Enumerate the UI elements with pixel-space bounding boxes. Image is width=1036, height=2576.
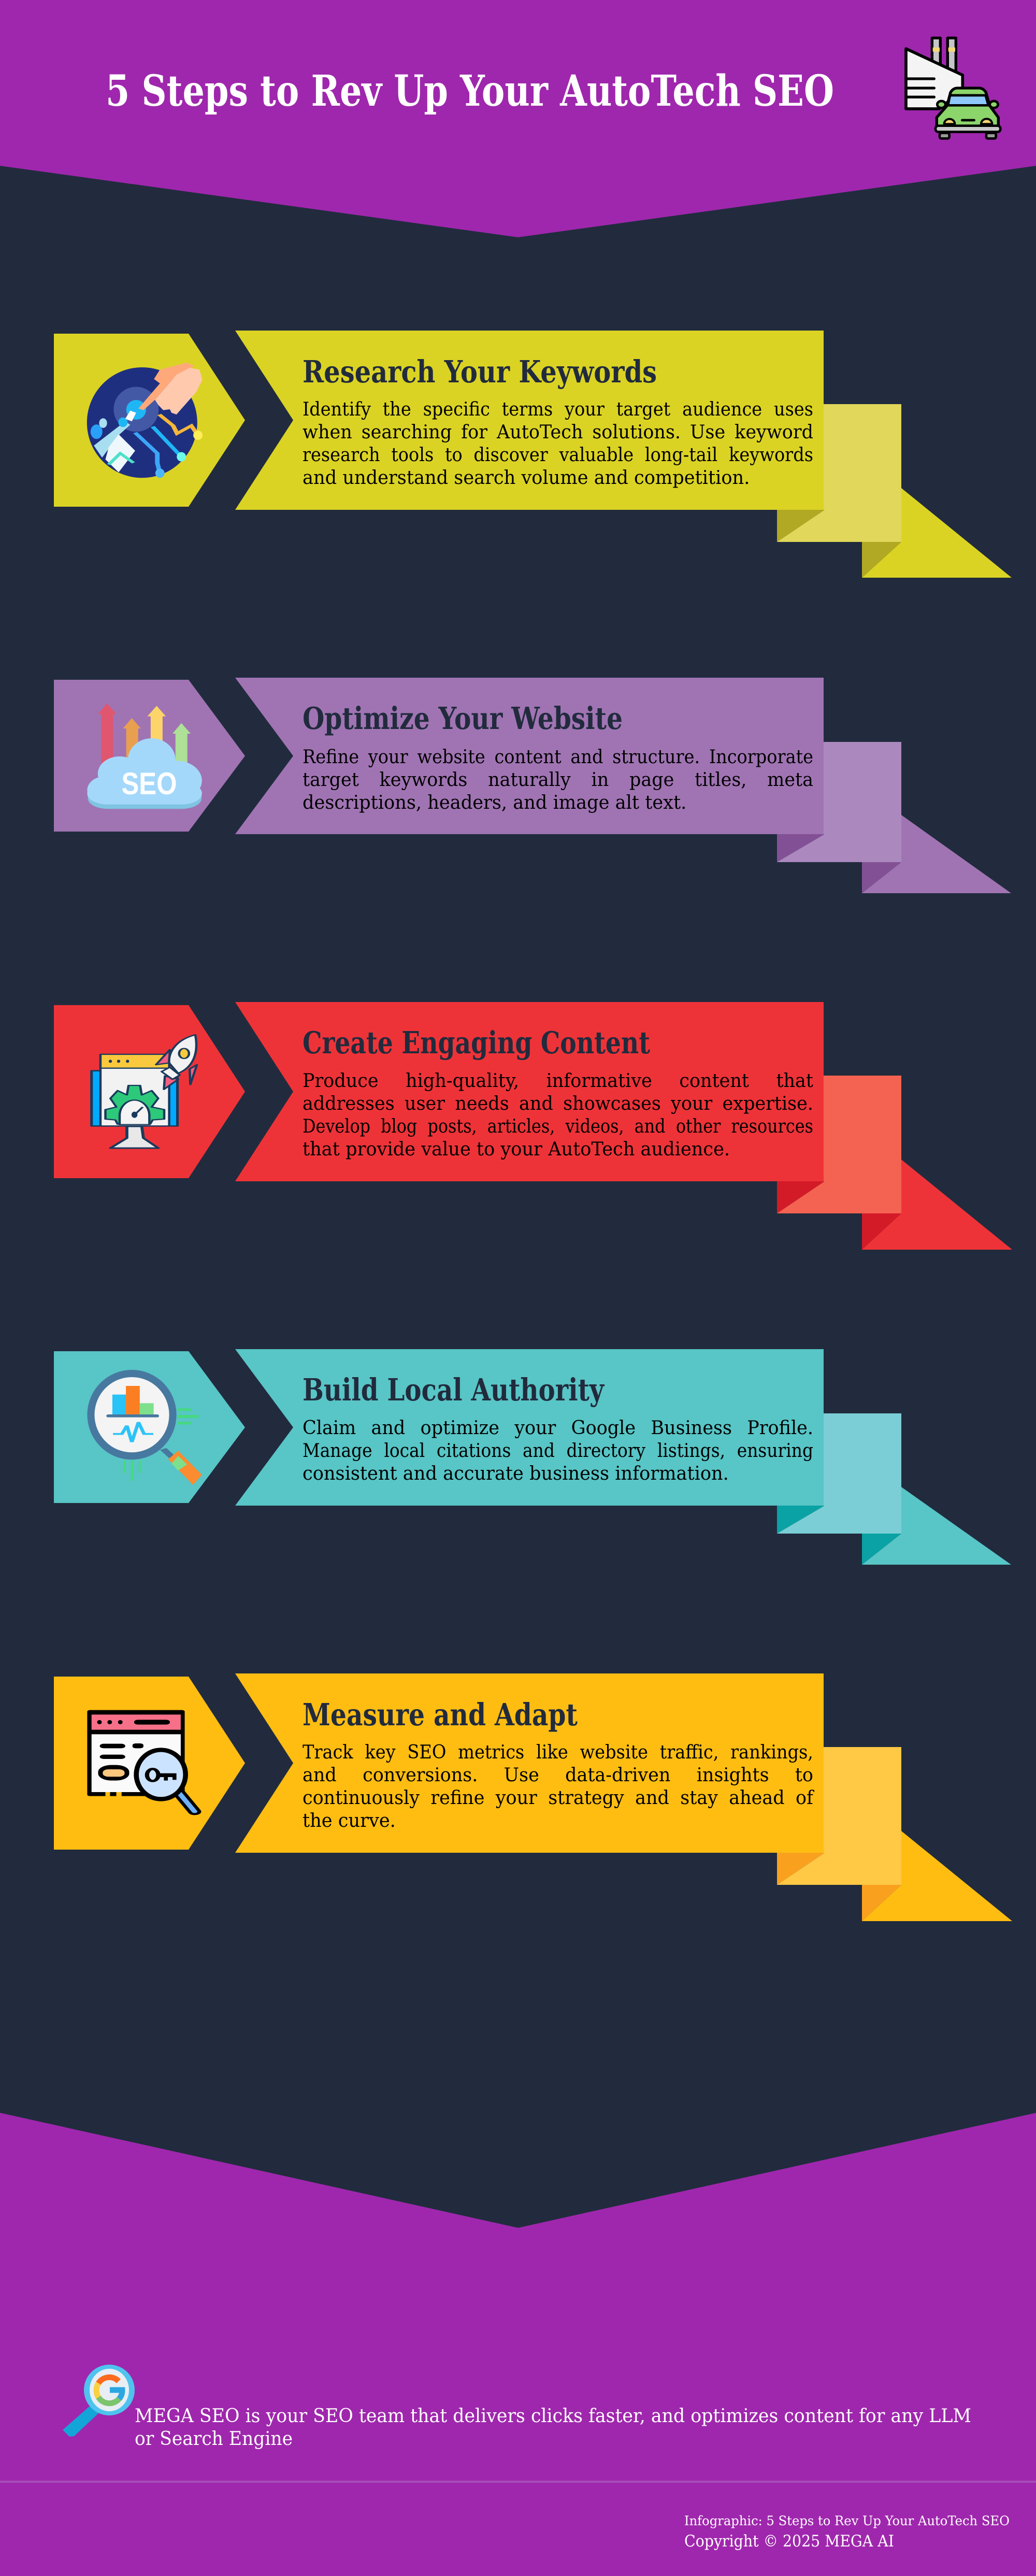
icon: browser window with key magnifier	[87, 1710, 195, 1812]
folded ribbon	[777, 1747, 1012, 1921]
body text	[303, 1742, 814, 1831]
content banner	[235, 1349, 824, 1506]
body text: Claim and optimize your Google Business Profile.	[303, 1418, 813, 1439]
body text	[303, 1418, 813, 1484]
body text: Refine your website content and structure. Incorporate	[303, 747, 813, 768]
icon hexagon background	[54, 1677, 245, 1850]
icon hexagon background	[54, 334, 245, 507]
credit text: Copyright © 2025 MEGA AI	[684, 2532, 894, 2551]
body text: Produce high-quality, informative content that	[303, 1070, 813, 1092]
body text: that provide value to your AutoTech audience.	[303, 1139, 730, 1160]
title: 5 Steps to Rev Up Your AutoTech SEO	[106, 66, 834, 116]
header banner	[0, 0, 1036, 237]
icon: magnifier with chart	[87, 1370, 202, 1485]
icon: seo cloud with arrows: SEO	[121, 766, 177, 801]
body text: continuously refine your strategy and stay ahead of	[303, 1787, 813, 1809]
folded ribbon	[777, 404, 1012, 578]
icon: factory and car	[906, 38, 1000, 138]
panel: step 2 optimize your website	[54, 678, 1011, 893]
footer panel	[0, 2113, 1036, 2576]
body text: and understand search volume and competition.	[303, 467, 750, 489]
body text	[303, 399, 813, 489]
credit text: Infographic: 5 Steps to Rev Up Your AutoTech SEO	[684, 2513, 1010, 2528]
icon: google magnifier	[63, 2365, 135, 2437]
content banner	[235, 1002, 824, 1181]
body text: when searching for AutoTech solutions. Use keyword	[303, 422, 813, 443]
icon: web page with gear gauge and rocket	[92, 1035, 197, 1148]
heading: Measure and Adapt	[303, 1697, 578, 1733]
tagline	[135, 2406, 971, 2450]
body text: addresses user needs and showcases your expertise.	[303, 1093, 813, 1114]
body text: Track key SEO metrics like website traffic, rankings,	[303, 1742, 813, 1763]
heading: Research Your Keywords	[303, 354, 657, 390]
heading: Build Local Authority	[303, 1372, 605, 1408]
folded ribbon	[777, 1413, 1011, 1565]
panel: step 1 research your keywords	[54, 331, 1012, 578]
body text: target keywords naturally in page titles, meta	[303, 769, 813, 791]
heading: Optimize Your Website	[303, 700, 623, 736]
body text	[303, 1070, 813, 1160]
icon hexagon background	[54, 680, 245, 832]
body text: research tools to discover valuable long-tail keywords	[303, 445, 813, 466]
content banner	[235, 678, 824, 834]
heading: Create Engaging Content	[303, 1025, 650, 1061]
body text: Develop blog posts, articles, videos, and other resources	[303, 1116, 813, 1137]
body text: and conversions. Use data-driven insights to	[303, 1765, 813, 1786]
body text: descriptions, headers, and image alt text.	[303, 792, 686, 813]
header background shape	[0, 0, 1036, 237]
panel: step 5 measure and adapt	[54, 1673, 1012, 1921]
tagline: MEGA SEO is your SEO team that delivers clicks faster, and optimizes content for any LLM	[135, 2406, 971, 2427]
panel: step 3 create engaging content	[54, 1002, 1012, 1250]
content banner	[235, 331, 824, 510]
icon hexagon background	[54, 1351, 245, 1503]
credit text	[684, 2513, 1010, 2551]
icon: pointing hand on circuit	[87, 363, 203, 478]
panel: step 4 build local authority	[54, 1349, 1011, 1565]
icon: seo cloud with arrows	[87, 704, 202, 809]
icon hexagon background	[54, 1005, 245, 1178]
folded ribbon	[777, 1076, 1012, 1250]
folded ribbon	[777, 742, 1011, 893]
body text: the curve.	[303, 1810, 396, 1831]
tagline: or Search Engine	[135, 2428, 293, 2450]
body text: Manage local citations and directory listings, ensuring	[303, 1440, 813, 1462]
footer background shape	[0, 2113, 1036, 2576]
body text: consistent and accurate business information.	[303, 1463, 729, 1484]
body text	[303, 747, 813, 813]
content banner	[235, 1673, 824, 1853]
body text: Identify the specific terms your target audience uses	[303, 399, 813, 420]
